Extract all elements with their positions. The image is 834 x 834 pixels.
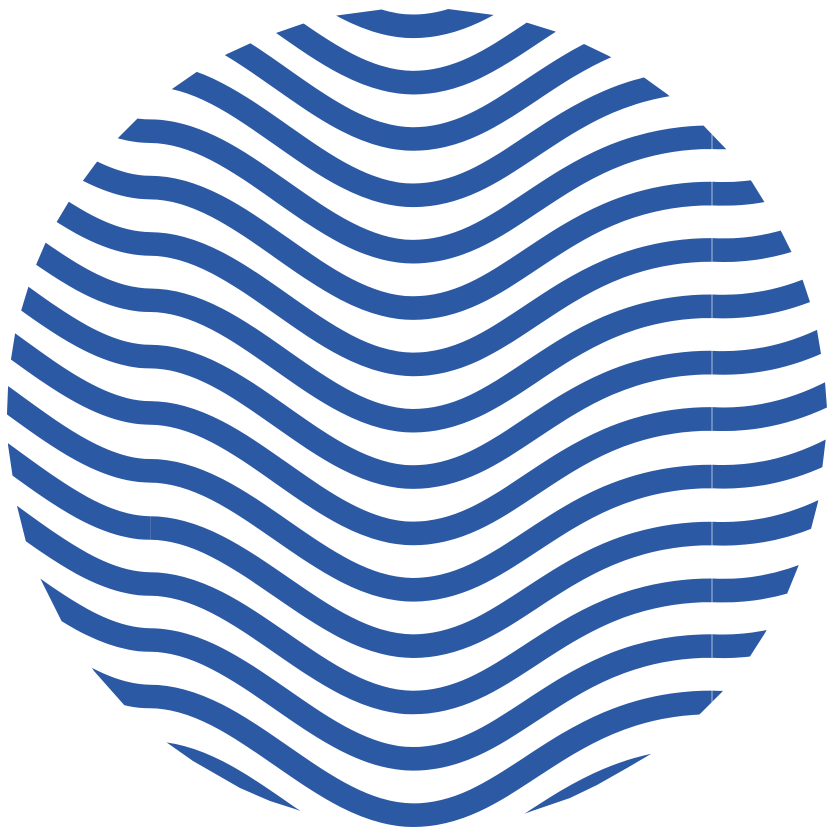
wave stripe 1 (336, 9, 494, 38)
wave stripe 12 (0, 452, 834, 646)
wave stripe 3 (224, 43, 612, 151)
wave stripe 4 (172, 72, 670, 208)
wave stripe 9 (0, 281, 834, 477)
wave stripe 5 (118, 118, 726, 264)
wave stripe 13 (0, 508, 834, 702)
wave stripe 11 (0, 395, 834, 590)
wave stripe 7 (56, 202, 792, 376)
wave stripe 8 (36, 242, 810, 432)
wave stripe 10 (0, 337, 834, 533)
wave stripe 2 (276, 22, 556, 94)
wave stripe 14 (40, 578, 767, 771)
wave stripe 6 (82, 162, 764, 320)
wave stripe 16 (166, 742, 652, 814)
wave stripe 15 (92, 668, 723, 827)
